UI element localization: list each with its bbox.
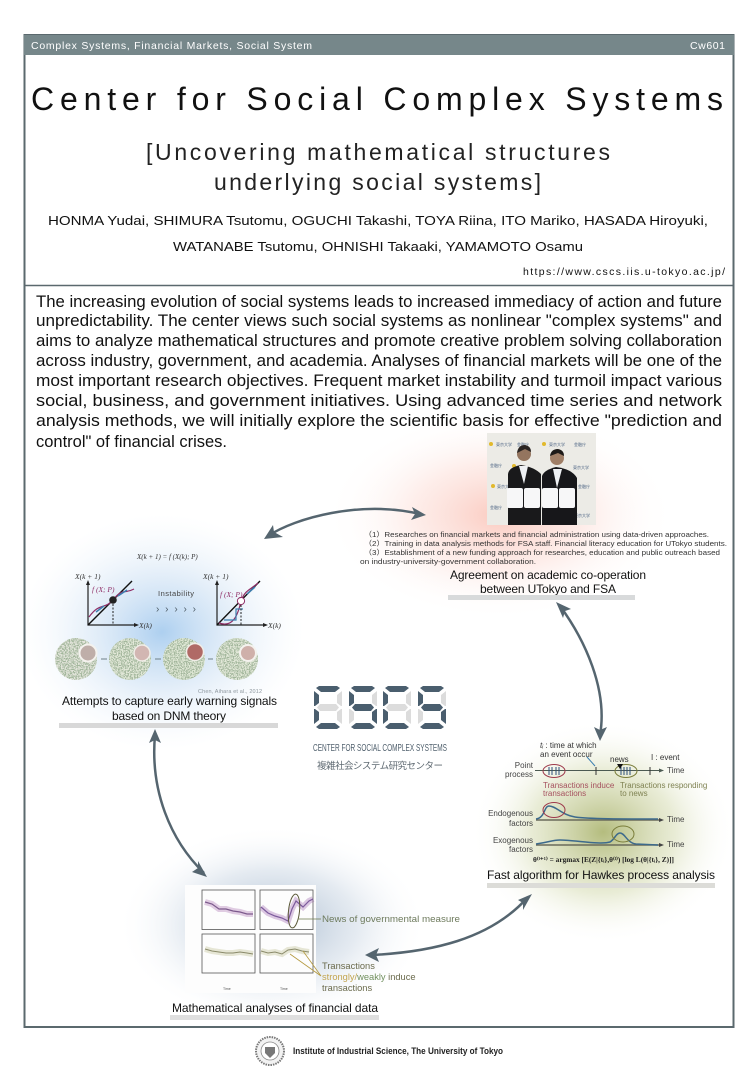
left bifurcation graph — [74, 572, 152, 630]
panel: financial data — [170, 885, 460, 1020]
caption underline — [170, 1015, 379, 1020]
arrow: Hawkes to financial data — [365, 894, 532, 962]
title: Center for Social Complex Systems — [31, 81, 723, 117]
caption: Mathematical analyses of financial data — [172, 1001, 378, 1015]
point process diagram: Transactions responding — [620, 781, 707, 790]
point process diagram — [505, 741, 707, 798]
caption: between UTokyo and FSA — [480, 582, 616, 596]
icon: university seal — [256, 1037, 284, 1065]
agreement items: （1）Researches on financial markets and financial administration using data-driven approaches. — [364, 530, 709, 539]
header bar — [24, 35, 734, 55]
institute name: Institute of Industrial Science, The University of Tokyo — [293, 1046, 503, 1057]
factor curves: factors — [509, 845, 533, 854]
charts: Time — [280, 987, 288, 991]
subtitle: underlying social systems] — [214, 169, 541, 195]
caption: based on DNM theory — [112, 709, 226, 723]
photo: signing — [487, 433, 596, 525]
left bifurcation graph: X(k) — [138, 621, 152, 630]
website url: https://www.cscs.iis.u-tokyo.ac.jp/ — [523, 266, 725, 278]
formula: X(k + 1) = f (X(k); P) — [136, 553, 198, 561]
chart annotations: News of governmental measure — [322, 914, 460, 924]
chart annotations: strongly/weakly induce — [322, 972, 416, 982]
logo japanese name: 複雑社会システム研究センター — [317, 758, 443, 772]
description paragraph: social, business, and government initiatives. Using advanced time series and network — [36, 392, 723, 410]
code label: Cw601 — [690, 40, 725, 52]
left bifurcation graph: f (X; P) — [92, 585, 115, 594]
description paragraph: aims to analyze mathematical structures and promote creative problem solving collaboration — [36, 332, 722, 350]
right bifurcation graph — [202, 572, 281, 630]
subtitle — [146, 139, 610, 195]
colour glow: financial data — [117, 825, 427, 1025]
arrow: DNM to agreement — [264, 507, 426, 539]
point process diagram: Transactions induce — [543, 781, 615, 790]
photo: signing: 東京大学 — [573, 464, 589, 470]
authors: HONMA Yudai, SHIMURA Tsutomu, OGUCHI Takashi, TOYA Riina, ITO Mariko, HASADA Hiroyuki, — [48, 213, 708, 228]
colour glow: Hawkes process — [471, 720, 735, 944]
description paragraph: control" of financial crises. — [36, 433, 227, 451]
description paragraph: across industry, government, and academia. Analyses of financial markets will be one of the — [36, 352, 722, 370]
caption: Agreement on academic co-operation — [450, 568, 646, 582]
right bifurcation graph: X(k) — [267, 621, 281, 630]
photo: signing: 東京大学 — [497, 483, 513, 489]
point process diagram: process — [505, 770, 533, 779]
panel: agreement — [360, 433, 727, 600]
charts: Time — [223, 987, 231, 991]
photo: signing: 金融庁 — [574, 441, 586, 447]
citation: Chen, Aihara et al., 2012 — [198, 689, 262, 695]
arrow: agreement to Hawkes — [556, 602, 607, 741]
charts — [202, 890, 321, 991]
digit: C — [314, 686, 342, 729]
description paragraph — [36, 293, 723, 451]
digit: C — [383, 686, 411, 729]
instability label — [156, 589, 196, 615]
colour glow: DNM theory — [20, 514, 304, 750]
digit: S — [349, 686, 377, 729]
agreement items: （3）Establishment of a new funding approach for researches, education and public outreach based — [364, 548, 720, 557]
point process diagram: Point — [515, 761, 534, 770]
point process diagram: I : event — [651, 753, 680, 762]
caption: Fast algorithm for Hawkes process analysis — [487, 868, 715, 882]
photo: signing: 東京大学 — [549, 441, 565, 447]
chart annotations — [322, 914, 460, 993]
arrow: financial data to DNM — [149, 729, 207, 877]
caption underline — [487, 883, 715, 888]
factor curves: Time — [667, 815, 685, 824]
EM formula: θ⁽ˡ⁺¹⁾ = argmax [E(Z|{tᵢ},θ⁽ˡ⁾) [log L(θ|{tᵢ}, Z)]] — [533, 856, 674, 864]
point process diagram: transactions — [543, 789, 586, 798]
caption: Attempts to capture early warning signals — [62, 694, 277, 708]
factor curves: factors — [509, 819, 533, 828]
instability label: Instability — [158, 589, 194, 598]
point process diagram: news — [610, 755, 629, 764]
description paragraph: unpredictability. The center views such social systems as nonlinear "complex systems" and — [36, 312, 722, 330]
logo: CSCS — [313, 686, 447, 772]
photo: signing: 金融庁 — [517, 441, 529, 447]
category label: Complex Systems, Financial Markets, Social System — [31, 40, 312, 52]
digit: S — [418, 686, 446, 729]
right bifurcation graph: f (X; P) — [220, 590, 243, 599]
factor curves: Endogenous — [488, 809, 533, 818]
description paragraph: most important research objectives. Frequent market instability and turmoil impact various — [36, 372, 722, 390]
point process diagram: to news — [620, 789, 648, 798]
agreement items: on industry-university-government collaboration. — [360, 557, 536, 566]
panel: Hawkes process — [487, 741, 715, 888]
photo: signing: 東京大学 — [496, 441, 512, 447]
caption — [62, 694, 277, 723]
agreement items: （2）Training in data analysis methods for FSA staff. Financial literacy education for UTokyo students. — [364, 539, 727, 548]
photo: signing: 金融庁 — [490, 504, 502, 510]
right bifurcation graph: X(k + 1) — [202, 572, 229, 581]
instability label: › › › › › — [156, 604, 196, 615]
panel: DNM theory — [55, 553, 281, 728]
logo name: CENTER FOR SOCIAL COMPLEX SYSTEMS — [313, 743, 447, 754]
caption underline — [448, 595, 635, 600]
authors: WATANABE Tsutomu, OHNISHI Takaaki, YAMAMOTO Osamu — [173, 239, 583, 254]
left bifurcation graph: X(k + 1) — [74, 572, 101, 581]
factor curves — [488, 802, 685, 854]
point process diagram: an event occur — [540, 750, 593, 759]
description paragraph: analysis methods, we will initially explore the scientific basis for effective "prediction and — [36, 412, 722, 430]
chart annotations: Transactions — [322, 961, 375, 971]
photo: signing: 金融庁 — [578, 483, 590, 489]
chart annotations: transactions — [322, 983, 372, 993]
colour glow: agreement — [325, 410, 675, 620]
caption underline — [59, 723, 278, 728]
agreement items — [360, 530, 727, 566]
point process diagram: tᵢ : time at which — [540, 741, 597, 750]
authors — [48, 213, 708, 254]
subtitle: [Uncovering mathematical structures — [146, 139, 610, 165]
factor curves: Time — [667, 840, 685, 849]
photo: signing: 金融庁 — [490, 462, 502, 468]
description paragraph: The increasing evolution of social systems leads to increased immediacy of action and future — [36, 293, 722, 311]
photo: signing: 東京大学 — [574, 512, 590, 518]
factor curves: Exogenous — [493, 836, 533, 845]
chart background — [185, 885, 316, 993]
caption — [450, 568, 646, 596]
network circles — [55, 638, 258, 680]
point process diagram: Time — [667, 766, 685, 775]
